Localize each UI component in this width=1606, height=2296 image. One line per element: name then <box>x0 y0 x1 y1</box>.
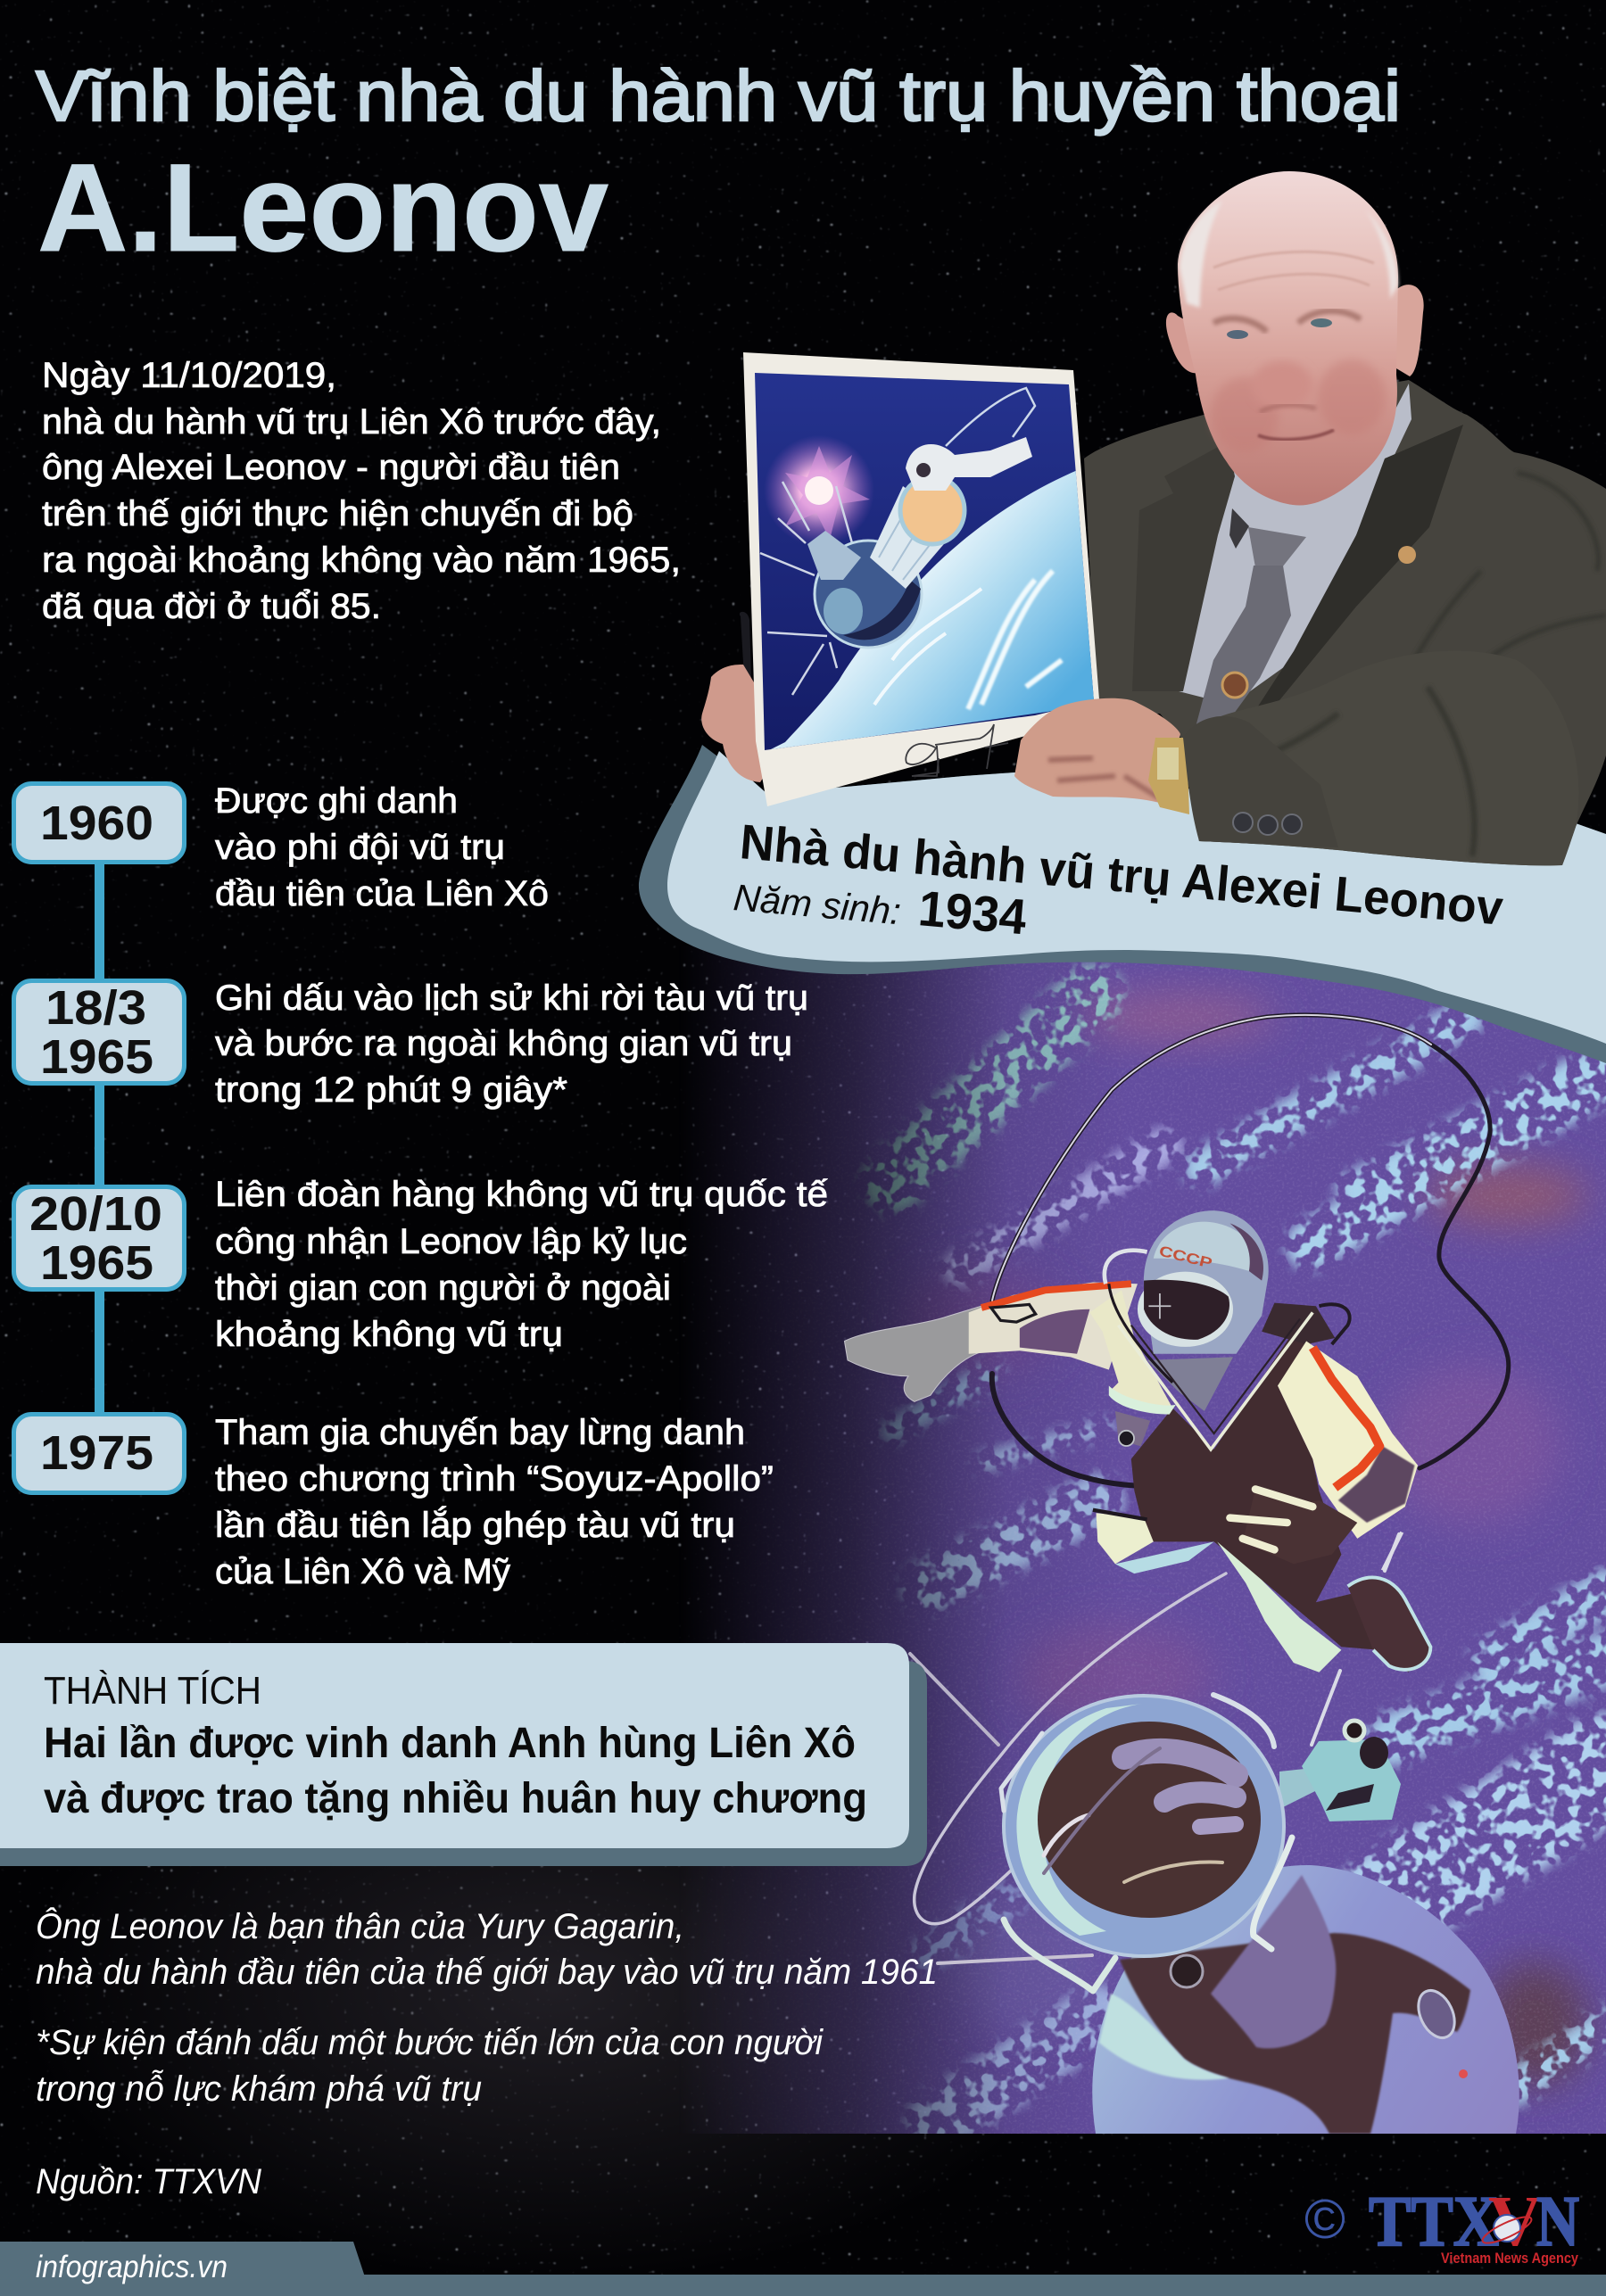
logo: TTXVN Vietnam News Agency: V <box>1488 2183 1542 2261</box>
panel: achievements: và được trao tặng nhiều huân huy chương <box>44 1775 867 1822</box>
timeline entry 20/10/1965: khoảng không vũ trụ <box>215 1315 563 1354</box>
banner caption: Nhà du hành vũ trụ Alexei Leonov <box>738 814 1505 936</box>
timeline entry 1975: theo chương trình “Soyuz-Apollo” <box>215 1459 774 1499</box>
banner caption: Năm sinh: <box>732 876 903 932</box>
illustration: purple planet background with astronaut and spacecraft <box>703 951 1606 2134</box>
timeline entry 18/3/1965: và bước ra ngoài không gian vũ trụ <box>215 1024 792 1063</box>
intro text block: ông Alexei Leonov - người đầu tiên <box>42 448 620 487</box>
chest straps and shoulder <box>1112 1313 1171 1406</box>
intro text block: nhà du hành vũ trụ Liên Xô trước đây, <box>42 402 661 442</box>
banner caption: 1934 <box>916 880 1029 946</box>
tie <box>1196 508 1306 727</box>
pen <box>740 612 751 678</box>
timeline entry 1975: 1975 <box>40 1426 153 1480</box>
cable tether <box>910 1015 1509 1963</box>
footnotes text block: nhà du hành đầu tiên của thế giới bay vào vũ trụ năm 1961 <box>36 1953 938 1992</box>
airlock cylinder <box>870 486 959 589</box>
timeline entry 1960 <box>14 781 549 913</box>
timeline entry 20/10/1965: 20/10 <box>29 1187 162 1241</box>
logo: TTXVN Vietnam News Agency: N <box>1536 2183 1579 2261</box>
pins <box>1398 546 1416 564</box>
lit edge <box>1099 1994 1229 2080</box>
logo: TTXVN Vietnam News Agency: Vietnam News Agency <box>1441 2250 1578 2267</box>
panel: achievements: THÀNH TÍCH <box>44 1669 261 1713</box>
intro text block: đã qua đời ở tuổi 85. <box>42 587 381 626</box>
poster <box>743 352 1099 806</box>
intro text block: ra ngoài khoảng không vào năm 1965, <box>42 541 681 580</box>
hatch interior folds <box>1044 1748 1236 1882</box>
shadow on sphere <box>1120 1933 1470 2134</box>
helmet <box>1144 1210 1269 1354</box>
timeline entry 18/3/1965 <box>14 979 808 1110</box>
timeline entry 20/10/1965 <box>14 1175 828 1354</box>
timeline entry 1960: 1960 <box>40 797 153 850</box>
timeline entry 1960: vào phi đội vũ trụ <box>215 828 505 867</box>
timeline entry 18/3/1965: 1965 <box>40 1030 153 1084</box>
earth <box>767 469 1097 751</box>
panel: achievements: Hai lần được vinh danh Anh hùng Liên Xô <box>44 1720 856 1767</box>
timeline entry 18/3/1965: Ghi dấu vào lịch sử khi rời tàu vũ trụ <box>215 979 808 1018</box>
V collar <box>1147 1357 1233 1411</box>
sun <box>764 435 874 546</box>
signature <box>906 724 1008 776</box>
torso <box>1131 1339 1410 1672</box>
intro text block <box>42 356 681 626</box>
timeline entry 1975 <box>14 1413 774 1591</box>
footnotes text block: *Sự kiện đánh dấu một bước tiến lớn của con người <box>36 2023 824 2062</box>
left hand <box>701 665 788 782</box>
footer bar: infographics.vn <box>36 2250 228 2284</box>
title: A.Leonov <box>37 137 608 277</box>
timeline entry 1960: đầu tiên của Liên Xô <box>215 874 549 913</box>
logo: TTXVN Vietnam News Agency <box>1304 2183 1579 2267</box>
footer bar <box>0 2242 1606 2296</box>
footnotes text block <box>36 1906 938 2109</box>
footnotes text block: Ông Leonov là bạn thân của Yury Gagarin, <box>36 1906 684 1946</box>
watch <box>1148 738 1189 814</box>
timeline entry 20/10/1965: công nhận Leonov lập kỷ lục <box>215 1222 687 1261</box>
footnotes text block: trong nỗ lực khám phá vũ trụ <box>36 2069 482 2109</box>
timeline entry 20/10/1965: thời gian con người ở ngoài <box>215 1268 671 1308</box>
antennas <box>760 482 854 695</box>
head <box>1166 171 1424 506</box>
timeline entry 20/10/1965: 1965 <box>40 1236 153 1290</box>
hand and fingers <box>1323 1502 1358 1547</box>
title: Vĩnh biệt nhà du hành vũ trụ huyền thoại <box>36 56 1401 136</box>
timeline entry 18/3/1965: 18/3 <box>46 981 146 1035</box>
cuff buttons <box>1233 813 1302 835</box>
side instrument box <box>1279 1766 1329 1809</box>
legs and boot <box>1097 1513 1154 1564</box>
title <box>36 56 1401 277</box>
hatch ring <box>1004 1696 1284 1956</box>
neck cylinder <box>1211 1875 1336 2048</box>
jacket <box>1084 380 1606 865</box>
photo: Alexei Leonov holding poster <box>701 171 1606 865</box>
panel: name banner <box>639 745 1606 1063</box>
cuff <box>1183 716 1338 847</box>
timeline entry 18/3/1965: trong 12 phút 9 giây* <box>215 1070 567 1110</box>
timeline entry 20/10/1965: Liên đoàn hàng không vũ trụ quốc tế <box>215 1175 828 1214</box>
timeline entry 1960: Được ghi danh <box>215 781 458 821</box>
planet surface with cloud streaks <box>703 951 1606 2134</box>
lapels <box>1132 442 1235 691</box>
timeline entry 1975: lần đầu tiên lắp ghép tàu vũ trụ <box>215 1505 735 1545</box>
timeline <box>14 781 828 1591</box>
timeline connector line <box>95 856 104 1418</box>
source: Nguồn: TTXVN <box>36 2162 261 2201</box>
right hand <box>1014 698 1180 803</box>
facial shading <box>1211 252 1386 452</box>
left arm <box>969 1282 1138 1370</box>
glove <box>844 1306 985 1401</box>
astronaut <box>844 1210 1430 1672</box>
intro text block: Ngày 11/10/2019, <box>42 356 336 395</box>
sleeve <box>1183 651 1578 865</box>
spacecraft <box>1001 1695 1519 2134</box>
timeline entry 1975: của Liên Xô và Mỹ <box>215 1552 510 1591</box>
capsule sphere <box>815 541 922 648</box>
logo: TTXVN Vietnam News Agency: © <box>1304 2189 1345 2251</box>
astronaut: CCCP <box>1157 1243 1213 1272</box>
astronaut on poster <box>906 437 1032 491</box>
right arm with red stripe <box>1278 1342 1418 1539</box>
logo: TTXVN Vietnam News Agency: TTX <box>1369 2183 1499 2261</box>
intro text block: trên thế giới thực hiện chuyến đi bộ <box>42 494 633 533</box>
timeline entry 1975: Tham gia chuyến bay lừng danh <box>215 1413 745 1452</box>
shirt <box>1179 384 1411 705</box>
sphere body <box>1092 1865 1519 2134</box>
panel: achievements <box>0 1643 927 1866</box>
handrails <box>1001 1695 1292 1991</box>
